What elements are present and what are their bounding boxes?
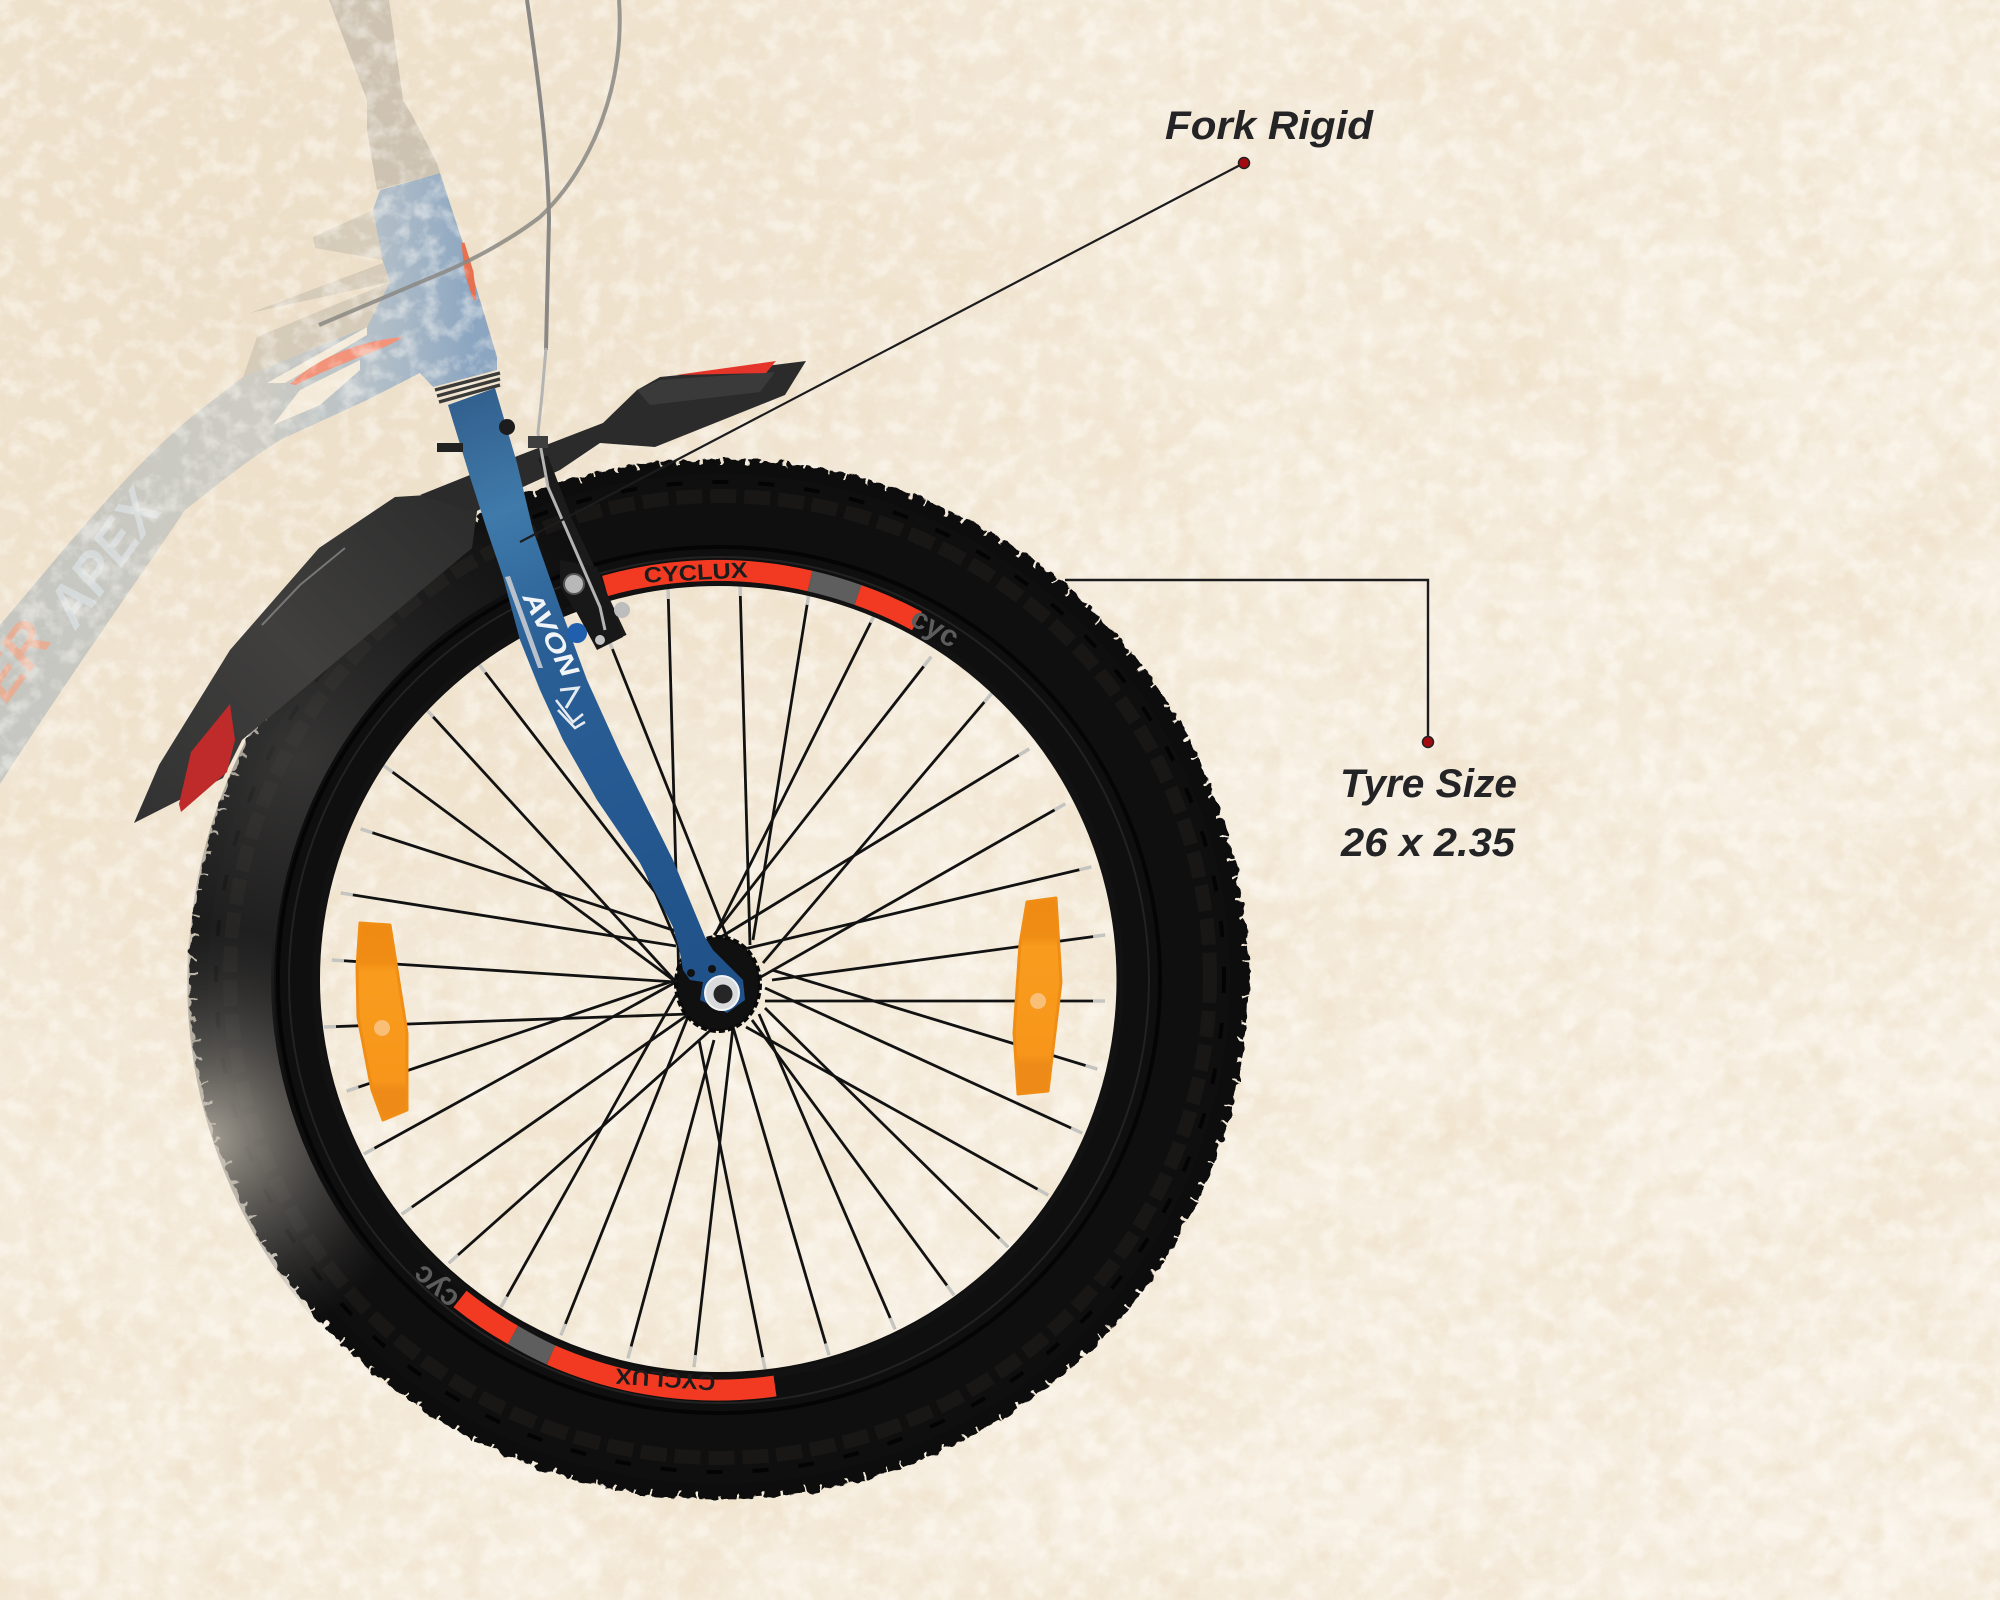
fork blade and dropout (448, 388, 745, 1013)
brake cable (538, 348, 605, 630)
tyre inner tread (230, 496, 1210, 1458)
callout marker (1422, 736, 1434, 748)
brake stud (567, 623, 587, 643)
fork (435, 373, 745, 1013)
ghost head tube and down tube (0, 173, 497, 784)
callout leader line (520, 163, 1244, 542)
fender ridge highlight (262, 548, 345, 625)
callout leader line (1065, 580, 1428, 742)
fork stud right (499, 419, 515, 435)
bottom rim logo: cyc (406, 1258, 465, 1316)
brake adjuster (614, 602, 630, 618)
brake assembly (437, 348, 630, 650)
ghost frame lettering: APEX (33, 476, 176, 640)
ghost frame slots (267, 327, 367, 425)
callout label: Fork Rigid (1165, 104, 1375, 148)
bottom rim brand text: CYCLUX (614, 1363, 716, 1395)
tyre knob shading (216, 482, 1224, 1472)
brake bolt (564, 574, 584, 594)
ghost head tube accent (463, 243, 475, 300)
front fender section (420, 361, 806, 512)
ghost bicycle frame (0, 0, 497, 784)
fork decal stripe (505, 576, 543, 668)
bottom rim decal (460, 1299, 775, 1390)
ghost frame fins (243, 210, 390, 377)
callout marker (1238, 158, 1250, 168)
front fender top face (637, 372, 775, 405)
front fender red reflector (676, 361, 776, 375)
fender rear reflector (179, 704, 235, 812)
left reflector (357, 923, 407, 1120)
brake arm (543, 457, 622, 637)
fork stud left (437, 443, 463, 452)
ghost frame accent (290, 337, 403, 385)
callout label line 1: Tyre Size (1340, 762, 1517, 806)
rim edge (278, 547, 1160, 1413)
tyre fade upper left (231, 497, 1207, 1461)
top rim logo: cyc (905, 601, 965, 655)
dropout holes (687, 965, 716, 977)
fork decal seven mark (560, 688, 578, 708)
top rim decal (605, 570, 917, 621)
axle washer (705, 976, 739, 1010)
fork brand text: AVON (516, 585, 586, 683)
spokes (324, 584, 1105, 1369)
tyre body (264, 530, 1174, 1428)
cable clamp (528, 436, 548, 448)
rim inner ring (316, 582, 1120, 1378)
ghost stem (329, 0, 440, 190)
hub flange (676, 937, 760, 1031)
fork crown rings (435, 373, 500, 402)
callout label line 2: 26 x 2.35 (1340, 821, 1516, 865)
spoke nipples (324, 584, 1105, 1369)
brake body (560, 560, 623, 650)
brake cables (319, 0, 620, 350)
tyre fade lower left (229, 496, 1209, 1462)
wheel (194, 463, 1244, 1495)
right reflector (1014, 898, 1061, 1094)
rim groove (289, 557, 1149, 1403)
tyre tread edge (194, 463, 1244, 1495)
brake pivot screw (595, 635, 605, 645)
top rim brand text: CYCLUX (643, 557, 749, 588)
callout: Fork Rigid (520, 104, 1375, 542)
rear fender section (134, 495, 478, 823)
callout: Tyre Size (1065, 580, 1517, 865)
fork decal chevron (556, 700, 585, 728)
axle nut (714, 984, 732, 1004)
